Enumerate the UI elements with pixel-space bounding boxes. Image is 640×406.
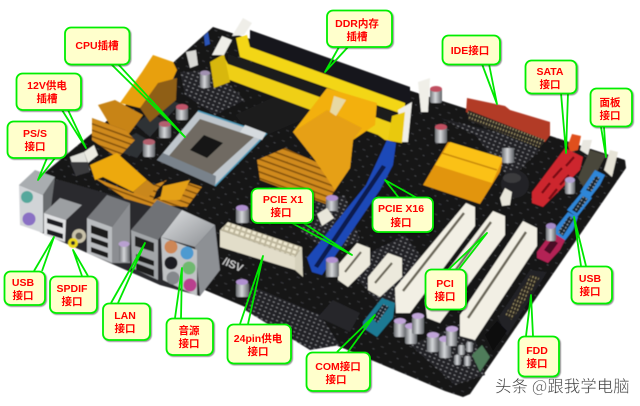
callout: PCIE X1: 接口 [270, 206, 292, 219]
callout: IDE: IDE接口 [451, 44, 489, 57]
callout: PCIE X1 [252, 188, 352, 255]
rear IO: SPDIF [68, 229, 86, 248]
callout: audio [166, 268, 213, 355]
callout: PS/2 [8, 122, 66, 180]
callout: PCI [426, 233, 487, 310]
callout: 12V power: 12V供电 [27, 79, 67, 92]
watermark: 头条 @跟我学电脑 [495, 373, 630, 397]
heatsink: center [257, 88, 377, 204]
battery [501, 170, 529, 198]
callout: COM: COM接口 [315, 360, 361, 373]
small connectors [186, 32, 512, 226]
callout: PCIE X16: 接口 [390, 216, 412, 229]
callout: SATA: SATA [536, 66, 564, 78]
callout: USB right: 接口 [580, 285, 600, 298]
callout: front panel: 面板 [600, 96, 621, 109]
FDD connector [485, 270, 547, 351]
PCI slots [395, 203, 537, 340]
IDE connector [466, 98, 550, 148]
callout: LAN [103, 243, 150, 340]
USB headers [552, 170, 605, 247]
callout: USB right: USB [579, 273, 602, 285]
heatsink: left VRM [92, 55, 177, 158]
voltage regulator chokes [118, 97, 180, 158]
callout: SPDIF: SPDIF [57, 283, 88, 295]
callout: CPU socket: CPU插槽 [75, 39, 119, 52]
rear IO: LAN [131, 200, 182, 280]
main chip [318, 300, 360, 332]
callout: front panel [590, 88, 632, 157]
rear IO: USB [44, 198, 82, 242]
callout: PCIE X16 [372, 180, 433, 232]
callout: COM [306, 315, 375, 391]
circuit clusters [180, 70, 540, 385]
callout: 12V power [16, 74, 86, 148]
24pin power connector [220, 222, 303, 277]
callout: FDD [518, 295, 559, 376]
callout: DDR memory [325, 10, 392, 72]
callout: PS/2: PS/S [23, 128, 47, 140]
callout: CPU socket [65, 28, 185, 137]
callout: IDE [442, 36, 500, 104]
rear IO: back plate [19, 180, 220, 296]
front panel headers [578, 150, 618, 188]
COM connector [363, 298, 395, 337]
capacitors [143, 70, 575, 366]
callout: audio: 音源 [178, 324, 200, 337]
callout: SATA: 接口 [540, 78, 560, 91]
heatsink: chipset [423, 142, 503, 204]
callout: LAN: LAN [114, 310, 136, 322]
callout: front panel: 接口 [600, 109, 620, 122]
callout: FDD: 接口 [526, 357, 548, 370]
callout: 12V power: 插槽 [36, 92, 58, 105]
callout: audio: 接口 [178, 337, 200, 350]
callout: 24pin power [228, 256, 291, 364]
callout: SPDIF [50, 250, 97, 313]
rear IO: audio jacks [161, 210, 220, 296]
callout: 24pin power: 接口 [248, 345, 268, 358]
callout: DDR memory: 插槽 [346, 30, 368, 43]
callout: SATA [526, 60, 576, 153]
board print ASUS: /ISV [221, 256, 245, 275]
callout: USB left: USB [12, 277, 35, 289]
callout: DDR memory: DDR内存 [335, 17, 379, 30]
PCIE X1 slots [338, 243, 402, 297]
pink header [537, 232, 565, 263]
callout: USB right [572, 217, 612, 304]
callout: PCI: 接口 [434, 290, 456, 303]
SATA connectors [532, 134, 592, 207]
callout: LAN: 接口 [114, 322, 136, 335]
callout: COM: 接口 [326, 373, 346, 386]
12V power connector [70, 145, 98, 176]
callout: SPDIF: 接口 [62, 295, 82, 308]
callout: PCI: PCI [436, 278, 454, 290]
heatsink: lower left [90, 153, 202, 217]
callout: USB left: 接口 [12, 289, 34, 302]
PCIE X16 slot [307, 140, 396, 275]
callout: 24pin power: 24pin供电 [234, 332, 283, 345]
callout: FDD: FDD [526, 345, 548, 357]
callout: PCIE X1: PCIE X1 [263, 194, 303, 206]
CPU socket [157, 111, 266, 186]
green pin header [472, 345, 490, 372]
rear IO: USB and firewire [87, 195, 130, 263]
rear IO: PS/2 [19, 170, 55, 233]
callout: PS/2: 接口 [24, 140, 46, 153]
callout: USB left [4, 237, 54, 305]
DDR memory slots [210, 18, 430, 143]
callout: PCIE X16: PCIE X16 [378, 203, 424, 215]
